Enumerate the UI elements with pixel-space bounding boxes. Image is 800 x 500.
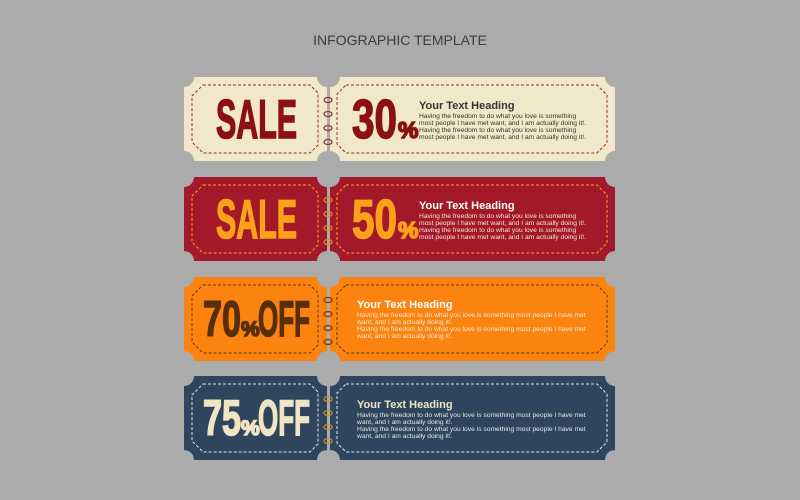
text block: Your Text Heading — [357, 299, 453, 311]
text block: want, and I am actually doing it!. — [356, 319, 453, 326]
text block: most people I have met want, and I am actually doing it!. — [419, 220, 586, 227]
label: 75% OFF — [203, 390, 310, 446]
text block: want, and I am actually doing it!. — [356, 333, 453, 340]
ticket: sale 50%: % — [398, 217, 418, 243]
text block — [356, 299, 586, 340]
text block — [419, 100, 586, 141]
label: 70% OFF: 70 — [203, 291, 241, 347]
label: 75% OFF: 75 — [203, 390, 241, 446]
label: 75% OFF: % — [241, 417, 260, 440]
ticket: 70% off — [184, 277, 615, 361]
text block — [356, 399, 586, 440]
text block: Having the freedom to do what you love is something most people I have met — [357, 312, 586, 319]
text block: most people I have met want, and I am actually doing it!. — [419, 234, 586, 241]
text block: Your Text Heading — [419, 200, 515, 212]
text block: want, and I am actually doing it!. — [356, 419, 453, 426]
label: 70% OFF: OFF — [258, 291, 310, 347]
label: SALE: SALE — [216, 88, 297, 150]
text block: Having the freedom to do what you love is something — [419, 113, 577, 120]
label: 70% OFF: % — [241, 318, 260, 341]
text block: most people I have met want, and I am actually doing it!. — [419, 120, 586, 127]
text block: Having the freedom to do what you love is something — [419, 127, 577, 134]
text block: most people I have met want, and I am actually doing it!. — [419, 134, 586, 141]
text block: Having the freedom to do what you love is something most people I have met — [357, 412, 586, 419]
label: 30%: 30 — [352, 88, 397, 150]
text block: Having the freedom to do what you love is something most people I have met — [357, 426, 586, 433]
text block: Having the freedom to do what you love is something — [419, 227, 577, 234]
ticket: sale 30%: % — [398, 117, 418, 143]
title: INFOGRAPHIC TEMPLATE — [313, 32, 487, 48]
text block: Having the freedom to do what you love is something — [419, 213, 577, 220]
text block — [419, 200, 586, 241]
label: 50%: 50 — [352, 188, 397, 250]
text block: Your Text Heading — [419, 100, 515, 112]
label: SALE: SALE — [216, 188, 297, 250]
ticket: 75% off — [184, 376, 615, 460]
ticket: sale 50% — [184, 177, 615, 261]
label: 70% OFF — [203, 291, 310, 347]
text block: Your Text Heading — [357, 399, 453, 411]
text block: want, and I am actually doing it!. — [356, 433, 453, 440]
label: 75% OFF: OFF — [258, 390, 310, 446]
text block: Having the freedom to do what you love is something most people I have met — [357, 326, 586, 333]
ticket: sale 30% — [184, 77, 615, 161]
